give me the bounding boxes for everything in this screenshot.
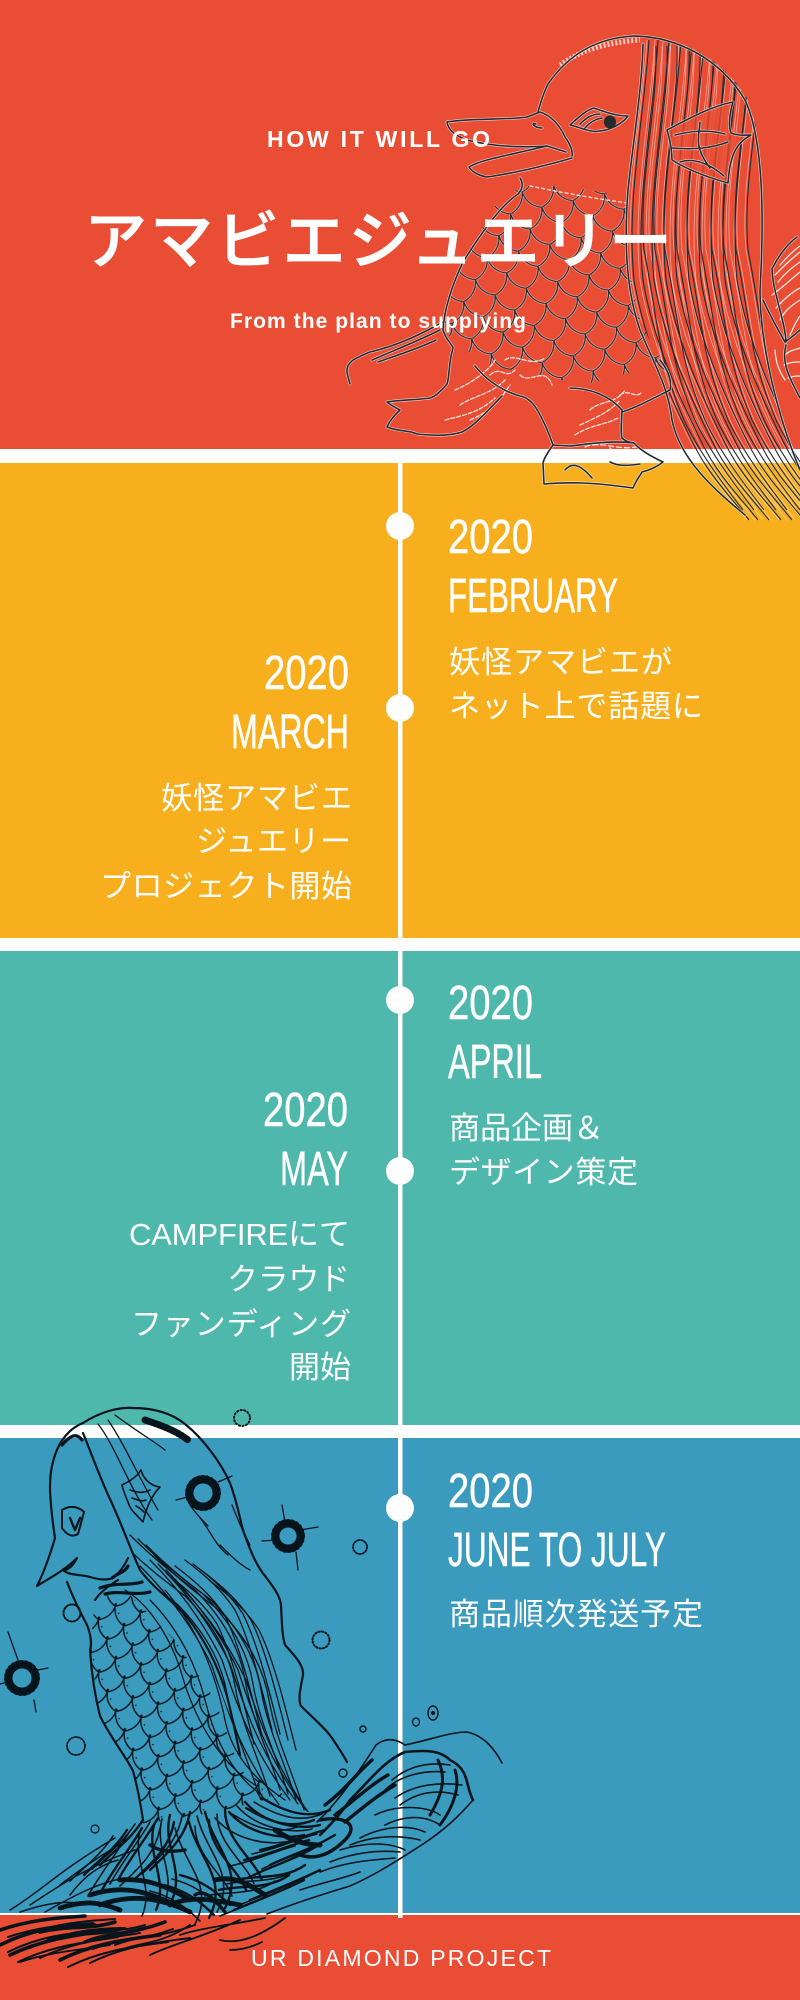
- illustration: amabie walking in the header: [347, 36, 800, 520]
- footer text: UR DIAMOND PROJECT: [251, 1945, 551, 1971]
- icon: face and head outline: [37, 1408, 347, 1820]
- heading: subtitle: From the plan to supplying: [230, 310, 526, 333]
- entry: June to July: 商品順次発送予定: [449, 1597, 703, 1632]
- icon: wave rising on the right: [267, 1732, 502, 1914]
- heading: kicker: HOW IT WILL GO: [267, 126, 490, 152]
- entry: April: デザイン策定: [449, 1155, 638, 1190]
- entry: February: ネット上で話題に: [449, 689, 703, 724]
- icon: ear fin: [122, 1470, 160, 1522]
- entry: February: [448, 511, 703, 724]
- entry: April: 商品企画＆: [449, 1111, 604, 1146]
- illustration: amabie rising from the waves: [0, 1408, 502, 1967]
- heading: title: アマビエジュエリー: [84, 207, 672, 277]
- entry: March: ジュエリー: [196, 824, 351, 859]
- entry: April: 2020: [448, 977, 533, 1030]
- timeline: [386, 463, 414, 1918]
- icon: hair strands: [98, 1415, 314, 1820]
- entry: March: [100, 647, 352, 904]
- entry: June to July: 2020: [448, 1465, 533, 1518]
- panel: blue band: [0, 1438, 800, 1913]
- icon: eye: [62, 1507, 84, 1536]
- icon: wave strokes over the footer: [0, 1916, 285, 1967]
- entry: March: MARCH: [231, 706, 349, 759]
- entry: June to July: [448, 1465, 703, 1632]
- entry: May: CAMPFIREにて: [129, 1217, 350, 1252]
- entry: February: 2020: [448, 511, 533, 564]
- icon: dark hair shading at the neck: [62, 1420, 188, 1594]
- entry: February: 妖怪アマビエが: [449, 645, 672, 680]
- entry: March: 妖怪アマビエ: [161, 781, 352, 816]
- entry: May: [129, 1084, 351, 1385]
- entry: March: プロジェクト開始: [100, 869, 352, 904]
- entry: May: クラウド: [227, 1262, 350, 1297]
- panel: teal band: [0, 951, 800, 1425]
- entry: May: 開始: [289, 1350, 351, 1385]
- panel: footer background: [0, 1915, 800, 2000]
- panel: header background: [0, 0, 800, 449]
- entry: March: 2020: [264, 647, 349, 700]
- entry: May: MAY: [280, 1143, 348, 1196]
- entry: May: 2020: [263, 1084, 348, 1137]
- entry: February: FEBRUARY: [448, 570, 618, 623]
- panel: yellow band: [0, 463, 800, 938]
- icon: spiky bubbles: [0, 1410, 438, 1833]
- entry: April: [448, 977, 638, 1190]
- entry: April: APRIL: [448, 1036, 542, 1089]
- icon: tangled hair and waves at the base: [10, 1798, 335, 1924]
- entry: May: ファンディング: [131, 1307, 351, 1342]
- entry: June to July: JUNE TO JULY: [448, 1524, 666, 1577]
